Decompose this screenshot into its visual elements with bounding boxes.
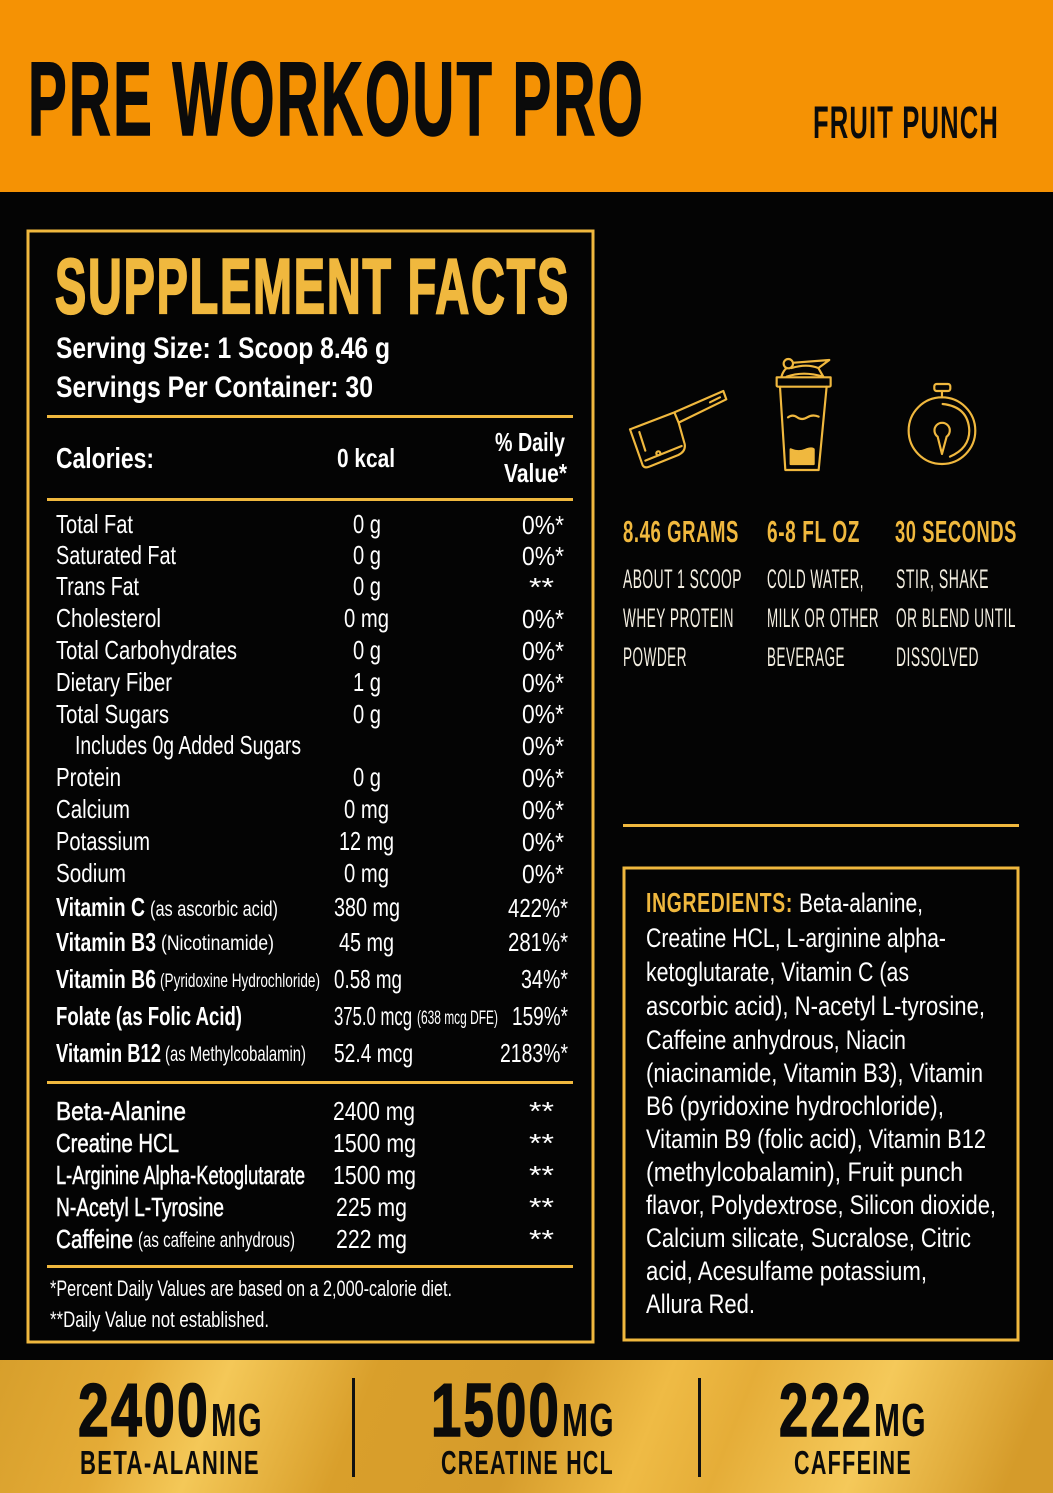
calories row bbox=[56, 427, 568, 488]
column: scoop directions: ABOUT 1 SCOOP bbox=[623, 564, 742, 594]
ingredients list bbox=[646, 888, 996, 1319]
row: vitamin b3: (Nicotinamide) bbox=[161, 932, 274, 955]
column: mixing directions bbox=[895, 514, 1017, 672]
row: folate bbox=[56, 1001, 568, 1031]
stat: creatine hcl: 1500 bbox=[431, 1368, 561, 1452]
stat: caffeine: 222 bbox=[779, 1368, 873, 1452]
row: cholesterol: 0%* bbox=[522, 604, 564, 634]
stat: caffeine: MG bbox=[874, 1394, 927, 1446]
heading: supplement facts: SUPPLEMENT FACTS bbox=[55, 242, 570, 330]
row: total sugars bbox=[56, 699, 564, 729]
calories row: 0 kcal bbox=[337, 443, 395, 473]
row: n-acetyl: 225 mg bbox=[336, 1192, 407, 1222]
row: l-arginine: 1500 mg bbox=[333, 1160, 416, 1190]
row: saturated fat: Saturated Fat bbox=[56, 540, 177, 570]
row: cholesterol: 0 mg bbox=[344, 603, 389, 633]
row: potassium: 0%* bbox=[522, 827, 564, 857]
row: caffeine: (as caffeine anhydrous) bbox=[138, 1229, 295, 1252]
row: saturated fat: 0%* bbox=[522, 541, 564, 571]
ingredients list: (niacinamide, Vitamin B3), Vitamin bbox=[646, 1058, 983, 1088]
ingredients list: Beta-alanine, bbox=[799, 888, 923, 918]
row: total fat: 0 g bbox=[353, 509, 381, 539]
row: total fat: Total Fat bbox=[56, 509, 134, 539]
row: sodium: Sodium bbox=[56, 858, 126, 888]
panel: ingredients bbox=[624, 868, 1018, 1340]
row: total sugars: Total Sugars bbox=[56, 699, 169, 729]
row: beta-alanine: Beta-Alanine bbox=[56, 1096, 186, 1126]
row: creatine hcl bbox=[56, 1128, 554, 1158]
row: total fat bbox=[56, 509, 564, 540]
row: protein: 0%* bbox=[522, 763, 564, 793]
row: vitamin c: Vitamin C bbox=[56, 892, 145, 922]
row: saturated fat: 0 g bbox=[353, 540, 381, 570]
row: vitamin c: 422%* bbox=[508, 893, 568, 923]
row: calcium bbox=[56, 794, 564, 825]
column: scoop directions: 8.46 GRAMS bbox=[623, 514, 739, 549]
row: n-acetyl: N-Acetyl L-Tyrosine bbox=[56, 1192, 224, 1222]
row: calcium: 0 mg bbox=[344, 794, 389, 824]
stat: beta-alanine: BETA-ALANINE bbox=[80, 1444, 260, 1481]
row: vitamin b6: Vitamin B6 bbox=[56, 964, 156, 994]
column: liquid directions: 6-8 FL OZ bbox=[767, 514, 860, 549]
stat: beta-alanine: MG bbox=[211, 1394, 263, 1446]
row: sodium: 0 mg bbox=[344, 858, 389, 888]
icon: stopwatch bbox=[909, 384, 975, 464]
ingredients list: Caffeine anhydrous, Niacin bbox=[646, 1025, 906, 1055]
ingredients list: acid, Acesulfame potassium, bbox=[646, 1256, 927, 1286]
panel border bbox=[28, 231, 593, 1342]
ingredients list: Calcium silicate, Sucralose, Citric bbox=[646, 1223, 971, 1253]
column: scoop directions: POWDER bbox=[623, 642, 687, 672]
ingredients list: ascorbic acid), N-acetyl L-tyrosine, bbox=[646, 991, 985, 1021]
header band bbox=[0, 0, 1053, 192]
row: trans fat: 0 g bbox=[353, 571, 381, 601]
row: beta-alanine: 2400 mg bbox=[333, 1096, 415, 1126]
footer band bbox=[0, 1360, 1053, 1493]
row: n-acetyl bbox=[56, 1192, 554, 1222]
ingredients border bbox=[624, 868, 1018, 1340]
row: trans fat: ** bbox=[529, 572, 554, 602]
calories row: % Daily bbox=[495, 427, 565, 457]
row: added sugars: 0%* bbox=[522, 731, 564, 761]
row: potassium: 12 mg bbox=[339, 826, 394, 856]
column: liquid directions: COLD WATER, bbox=[767, 564, 864, 594]
column: mixing directions: DISSOLVED bbox=[896, 642, 979, 672]
row: vitamin c bbox=[56, 892, 568, 923]
row: potassium bbox=[56, 826, 564, 857]
row: vitamin b6: 0.58 mg bbox=[334, 964, 402, 994]
row: dietary fiber bbox=[56, 667, 564, 698]
row: caffeine: 222 mg bbox=[336, 1224, 407, 1254]
nutrition rows bbox=[56, 509, 564, 889]
row: total fat: 0%* bbox=[522, 510, 564, 540]
row: total carbohydrates: 0%* bbox=[522, 636, 564, 666]
row: folate: 159%* bbox=[512, 1001, 568, 1031]
servings per container: Servings Per Container: 30 bbox=[56, 371, 373, 404]
row: caffeine: ** bbox=[529, 1224, 554, 1254]
row: creatine hcl: Creatine HCL bbox=[56, 1128, 179, 1158]
column: scoop directions: WHEY PROTEIN bbox=[623, 603, 734, 633]
row: beta-alanine: ** bbox=[529, 1096, 554, 1126]
text: MILK OR OTHER bbox=[767, 603, 879, 633]
row: protein: Protein bbox=[56, 762, 121, 792]
panel: supplement facts bbox=[28, 231, 593, 1342]
stat: caffeine bbox=[779, 1368, 927, 1481]
icon: shaker bottle bbox=[777, 359, 831, 470]
stat: creatine hcl: MG bbox=[562, 1394, 615, 1446]
row: vitamin b12: 2183%* bbox=[500, 1038, 568, 1068]
stat: beta-alanine: 2400 bbox=[78, 1368, 210, 1452]
column: scoop directions bbox=[623, 514, 742, 672]
row: dietary fiber: Dietary Fiber bbox=[56, 667, 172, 697]
row: total carbohydrates bbox=[56, 635, 564, 666]
row: potassium: Potassium bbox=[56, 826, 150, 856]
row: vitamin b12: 52.4 mcg bbox=[334, 1038, 413, 1068]
ingredients list: B6 (pyridoxine hydrochloride), bbox=[646, 1091, 944, 1121]
row: vitamin c: 380 mg bbox=[334, 892, 400, 922]
calories row: Value* bbox=[504, 458, 568, 488]
row: cholesterol: Cholesterol bbox=[56, 603, 161, 633]
row: vitamin b6: 34%* bbox=[521, 964, 568, 994]
row: folate: 375.0 mcg bbox=[334, 1001, 412, 1031]
active ingredient rows bbox=[56, 1096, 554, 1254]
row: trans fat: Trans Fat bbox=[56, 571, 140, 601]
row: vitamin b6: (Pyridoxine Hydrochloride) bbox=[160, 971, 320, 992]
row: vitamin b12: (as Methylcobalamin) bbox=[165, 1043, 306, 1066]
ingredients list: Creatine HCL, L-arginine alpha- bbox=[646, 923, 946, 953]
row: creatine hcl: ** bbox=[529, 1128, 554, 1158]
row: creatine hcl: 1500 mg bbox=[333, 1128, 416, 1158]
row: l-arginine: ** bbox=[529, 1160, 554, 1190]
row: total sugars: 0 g bbox=[353, 699, 381, 729]
ingredients list: ketoglutarate, Vitamin C (as bbox=[646, 957, 909, 987]
row: vitamin b3: Vitamin B3 bbox=[56, 927, 156, 957]
stat: caffeine: CAFFEINE bbox=[794, 1444, 912, 1481]
row: caffeine bbox=[56, 1224, 554, 1254]
footnotes bbox=[50, 1276, 452, 1332]
row: protein bbox=[56, 762, 564, 793]
row: vitamin b12 bbox=[56, 1038, 568, 1068]
row: dietary fiber: 1 g bbox=[353, 667, 381, 697]
row: total carbohydrates: Total Carbohydrates bbox=[56, 635, 237, 665]
serving size: Serving Size: 1 Scoop 8.46 g bbox=[56, 332, 390, 365]
row: total sugars: 0%* bbox=[522, 699, 564, 729]
row: vitamin b3: 45 mg bbox=[339, 927, 394, 957]
row: sodium bbox=[56, 858, 564, 889]
row: calcium: 0%* bbox=[522, 795, 564, 825]
row: protein: 0 g bbox=[353, 762, 381, 792]
row: added sugars: Includes 0g Added Sugars bbox=[75, 730, 301, 760]
row: dietary fiber: 0%* bbox=[522, 668, 564, 698]
ingredients list: Allura Red. bbox=[646, 1289, 755, 1319]
stat: creatine hcl: CREATINE HCL bbox=[441, 1444, 614, 1481]
icon: scoop bbox=[630, 391, 726, 467]
row: trans fat bbox=[56, 571, 554, 602]
ingredients list: (methylcobalamin), Fruit punch bbox=[646, 1157, 963, 1187]
row: folate: (638 mcg DFE) bbox=[417, 1008, 498, 1029]
row: l-arginine: L-Arginine Alpha-Ketoglutarate bbox=[56, 1160, 305, 1190]
row: vitamin b3: 281%* bbox=[508, 927, 568, 957]
row: saturated fat bbox=[56, 540, 564, 571]
row: caffeine: Caffeine bbox=[56, 1224, 133, 1254]
row: cholesterol bbox=[56, 603, 564, 634]
column: liquid directions bbox=[767, 514, 879, 672]
row: vitamin c: (as ascorbic acid) bbox=[150, 898, 278, 921]
row: sodium: 0%* bbox=[522, 859, 564, 889]
row: vitamin b6 bbox=[56, 964, 568, 994]
row: vitamin b12: Vitamin B12 bbox=[56, 1038, 161, 1068]
footnotes: *Percent Daily Values are based on a 2,000-calorie diet. bbox=[50, 1276, 452, 1301]
column: liquid directions: BEVERAGE bbox=[767, 642, 845, 672]
row: total carbohydrates: 0 g bbox=[353, 635, 381, 665]
ingredients label: INGREDIENTS: bbox=[646, 887, 793, 918]
row: folate: Folate (as Folic Acid) bbox=[56, 1001, 242, 1031]
vitamin rows bbox=[56, 892, 568, 1068]
calories row: Calories: bbox=[56, 443, 154, 475]
row: beta-alanine bbox=[56, 1096, 554, 1126]
row: added sugars bbox=[75, 730, 564, 761]
row: vitamin b3 bbox=[56, 927, 568, 957]
footnotes: **Daily Value not established. bbox=[50, 1307, 269, 1332]
row: n-acetyl: ** bbox=[529, 1192, 554, 1222]
row: calcium: Calcium bbox=[56, 794, 130, 824]
